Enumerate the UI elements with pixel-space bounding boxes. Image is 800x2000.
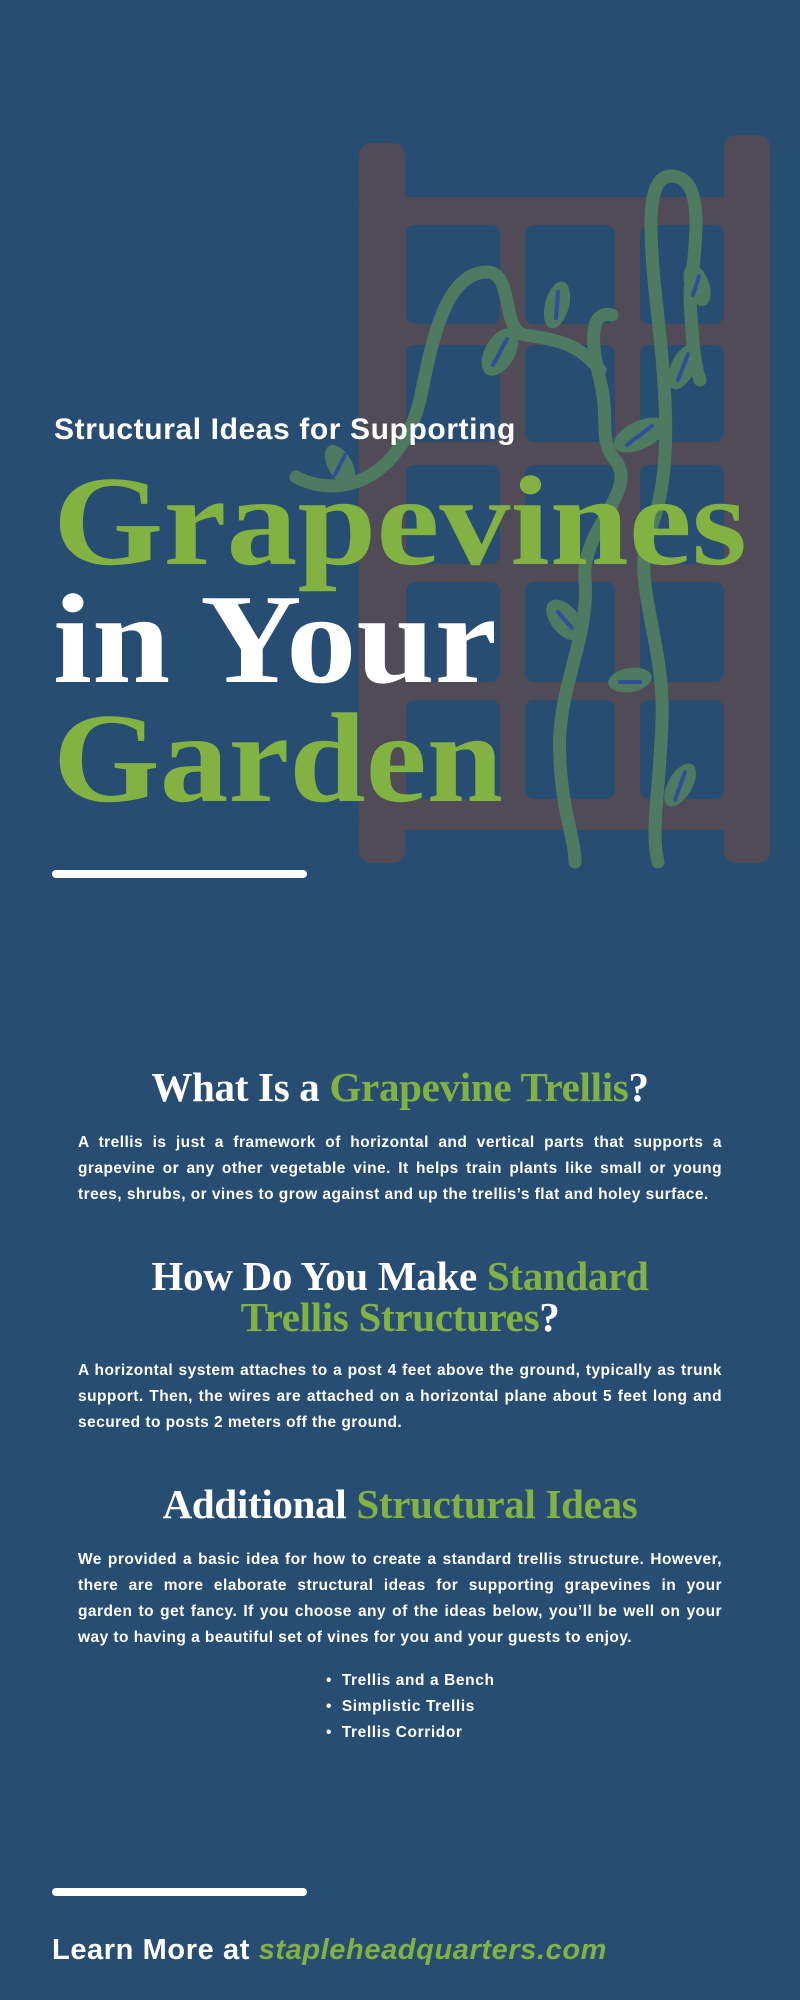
paragraph: We provided a basic idea for how to create a standard trellis structure. However, there are more elaborate structural ideas for supporting grapevines in your garden to get fancy. If you choose any of the ideas below, you’ll be well on your way to having a beautiful set of vines for you and your guests to enjoy. — [78, 1551, 722, 1646]
vines — [296, 176, 700, 862]
heading — [151, 1253, 649, 1340]
bullet list: • Simplistic Trellis — [326, 1698, 475, 1715]
leaves — [319, 260, 716, 812]
footer: learn more: Learn More at stapleheadquarters.com — [52, 1934, 607, 1966]
main title — [53, 450, 747, 820]
subtitle: Structural Ideas for Supporting — [54, 413, 516, 446]
heading: Additional Structural Ideas — [163, 1481, 637, 1527]
paragraph: A trellis is just a framework of horizontal and vertical parts that supports a grapevine or any other vegetable vine. It helps train plants like small or young trees, shrubs, or vines to grow against and up the trellis’s flat and holey surface. — [78, 1134, 722, 1203]
section: additional ideas — [78, 1481, 722, 1646]
trellis frame — [359, 135, 770, 863]
paragraph: A horizontal system attaches to a post 4 feet above the ground, typically as trunk support. Then, the wires are attached on a horizontal plane about 5 feet long and secured to posts 2 meters off the ground. — [78, 1362, 722, 1431]
heading: Trellis Structures? — [241, 1294, 559, 1340]
bullet list: • Trellis Corridor — [326, 1724, 463, 1741]
bullet list: • Trellis and a Bench — [326, 1672, 495, 1689]
bullet list — [326, 1672, 495, 1741]
section: what is a trellis — [78, 1064, 722, 1203]
bottom divider bar — [52, 1888, 307, 1896]
top divider bar — [52, 870, 307, 878]
main title: Grapevines — [53, 450, 747, 592]
illustration: trellis with vines — [290, 135, 770, 868]
main title: in Your — [53, 568, 497, 710]
heading: What Is a Grapevine Trellis? — [151, 1064, 649, 1110]
heading: How Do You Make Standard — [151, 1253, 649, 1299]
section: how to make — [78, 1253, 722, 1431]
